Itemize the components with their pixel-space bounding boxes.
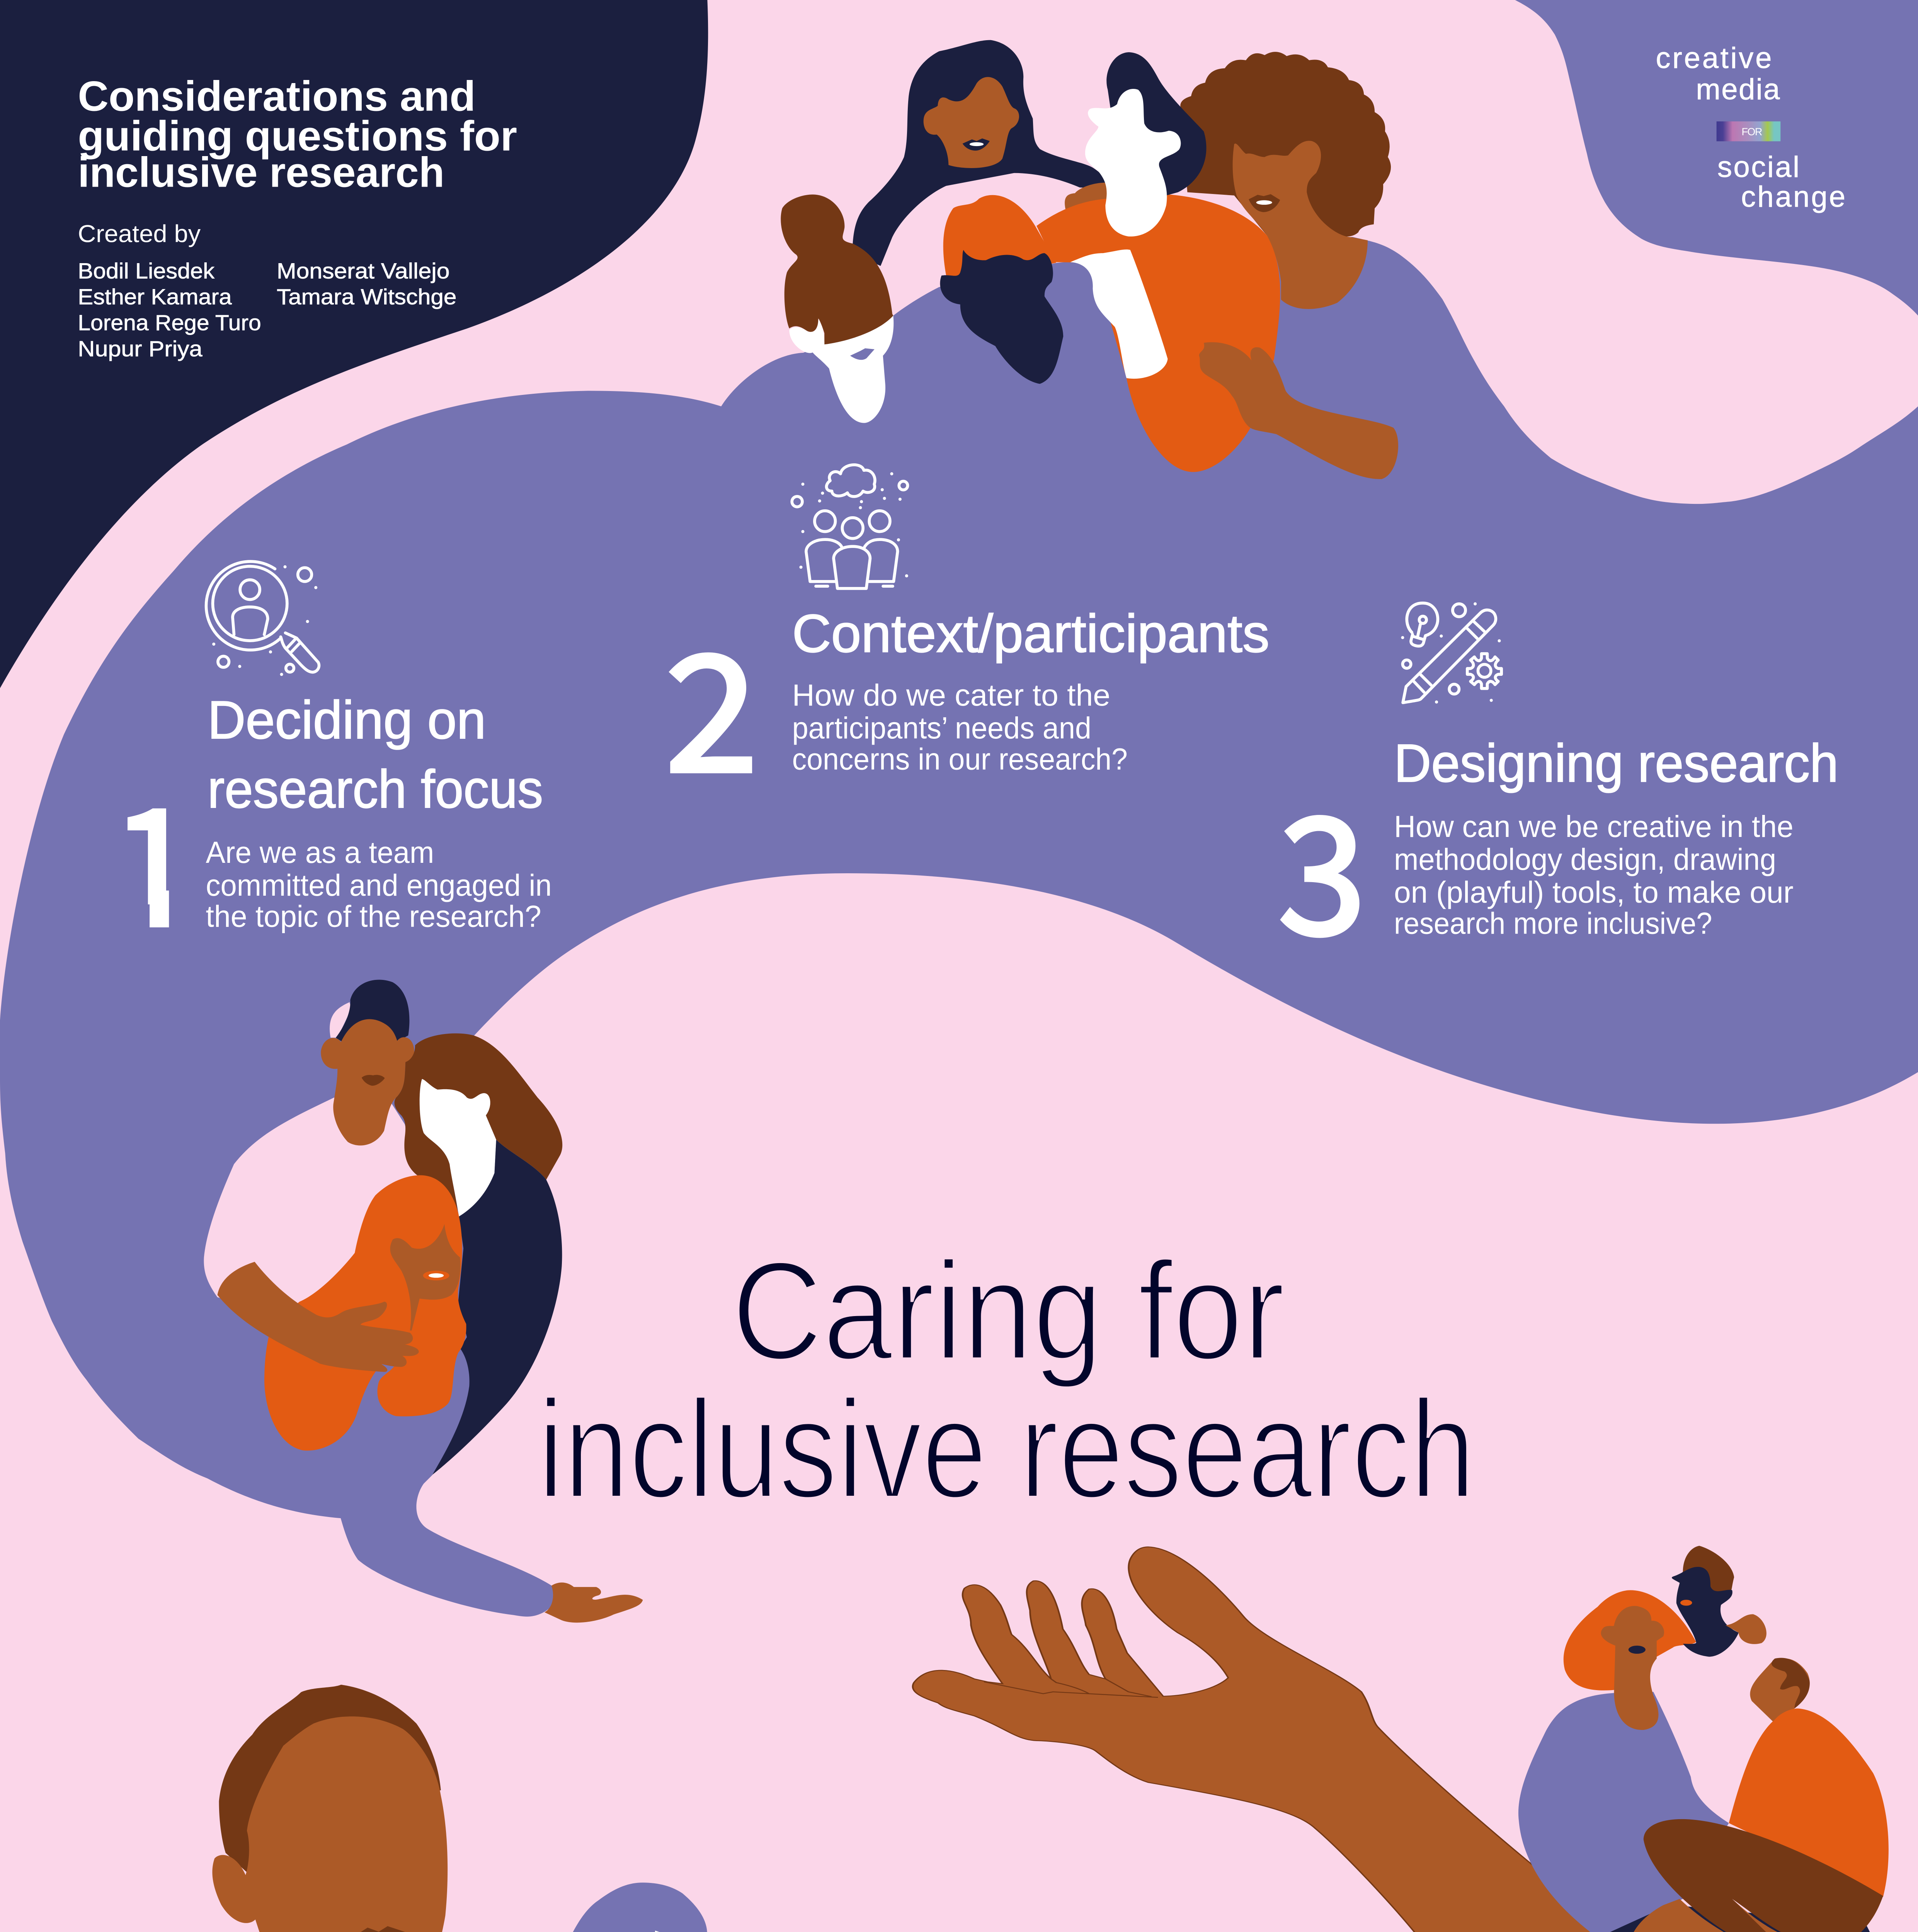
child's mouth bbox=[423, 1270, 449, 1281]
orange body bbox=[1036, 194, 1280, 472]
credit label: Created by bbox=[78, 221, 201, 248]
heading: considerations bbox=[78, 73, 517, 196]
heading block: considerations and credits bbox=[78, 73, 517, 361]
body 3: research more inclusive? bbox=[1394, 906, 1712, 940]
body 3 bbox=[1394, 810, 1794, 940]
number 3: 3 bbox=[1278, 747, 1366, 980]
author names: Bodil Liesdek bbox=[78, 259, 215, 283]
number 1 bbox=[128, 808, 169, 927]
orange body bbox=[1729, 1709, 1889, 1897]
heading: considerations: Considerations and bbox=[78, 73, 476, 120]
man's face bbox=[321, 1019, 414, 1146]
body 2: How do we cater to the bbox=[792, 678, 1110, 712]
white face with neck bbox=[1085, 89, 1181, 236]
main title: Caring for bbox=[732, 1232, 1285, 1390]
heading: considerations: guiding questions for bbox=[78, 112, 517, 160]
lips bbox=[1680, 1600, 1692, 1606]
number 2: 2 bbox=[665, 585, 758, 818]
face and neck bbox=[1601, 1606, 1664, 1730]
body 1 bbox=[206, 835, 552, 934]
author names: Lorena Rege Turo bbox=[78, 311, 261, 335]
icon: pencil, bulb and gear bbox=[1401, 602, 1501, 704]
illustration: seated people at bottom-right bbox=[1518, 1546, 1889, 1932]
body 3: How can we be creative in the bbox=[1394, 810, 1794, 844]
navy curly head bbox=[940, 250, 1063, 384]
icon: people with thought cloud bbox=[792, 465, 908, 588]
navy hair bbox=[1106, 52, 1206, 196]
icon: magnifier with person bbox=[206, 561, 319, 676]
face with dark hair bbox=[924, 77, 1019, 168]
logo: creative media for social change: FOR bbox=[1742, 126, 1762, 138]
body 1: Are we as a team bbox=[206, 835, 434, 869]
man's lips bbox=[362, 1075, 385, 1086]
dark leg bbox=[1644, 1819, 1883, 1932]
bun hair bbox=[781, 194, 893, 344]
background shape: navy wave bottom-right with notch bbox=[536, 1904, 1918, 1932]
author names bbox=[78, 259, 456, 361]
heading 1 bbox=[208, 690, 543, 819]
logo: creative media for social change: media bbox=[1696, 73, 1780, 106]
third person head bbox=[1750, 1658, 1810, 1721]
woman's white face bbox=[420, 1079, 496, 1216]
section 3: designing research bbox=[1278, 733, 1838, 980]
body 1: the topic of the research? bbox=[206, 900, 541, 934]
section 1: deciding on research focus bbox=[111, 690, 552, 971]
main title: inclusive research bbox=[538, 1371, 1475, 1527]
heading 1: research focus bbox=[208, 759, 543, 819]
woman's brown hair bbox=[395, 1033, 562, 1215]
inner leg bbox=[1732, 1899, 1801, 1932]
hand behind bbox=[1065, 183, 1113, 210]
number 1: 1 bbox=[111, 738, 197, 971]
lips bbox=[850, 348, 875, 360]
top head hair bbox=[1680, 1546, 1734, 1592]
man's face and neck bbox=[212, 1716, 448, 1932]
heading 3: Designing research bbox=[1394, 733, 1838, 793]
man's arm and hand bbox=[218, 1262, 419, 1372]
purple body bbox=[1518, 1692, 1729, 1932]
heading 2: Context/participants bbox=[792, 604, 1270, 663]
body 2: concerns in our research? bbox=[792, 742, 1128, 776]
orange sleeve bbox=[943, 195, 1056, 279]
body 1: committed and engaged in bbox=[206, 868, 552, 902]
lower brown leg bbox=[1630, 1899, 1752, 1932]
child's orange hair bbox=[264, 1175, 466, 1451]
author names: Esther Kamara bbox=[78, 285, 232, 309]
long navy hair bbox=[853, 40, 1106, 266]
heading: considerations: inclusive research bbox=[78, 149, 444, 196]
logo: creative media for social change: social bbox=[1717, 151, 1799, 184]
author names: Tamara Witschge bbox=[277, 285, 456, 309]
ear or hand bbox=[1726, 1614, 1767, 1644]
illustration: group of people at top bbox=[781, 40, 1398, 479]
man's hair bbox=[219, 1685, 441, 1875]
main title bbox=[538, 1232, 1475, 1527]
afro hair bbox=[1180, 52, 1391, 236]
background shape: bottom-left purple with man's shoulder and woman's hair bbox=[0, 1883, 865, 1932]
lower arm and hand bbox=[1199, 342, 1398, 479]
white arm bbox=[1070, 250, 1168, 379]
body 3: methodology design, drawing bbox=[1394, 842, 1776, 876]
man's navy hair bbox=[336, 980, 409, 1042]
body 2 bbox=[792, 678, 1128, 776]
illustration: embracing family on the left bbox=[204, 980, 643, 1622]
logo: creative media for social change bbox=[1656, 42, 1845, 213]
pink shirt bbox=[204, 1098, 420, 1320]
section 2: context and participants bbox=[665, 585, 1270, 818]
navy shirt bbox=[432, 1140, 562, 1475]
logo: creative media for social change: change bbox=[1741, 180, 1845, 213]
logo: creative media for social change: creative bbox=[1656, 42, 1772, 75]
lips bbox=[1629, 1646, 1646, 1654]
woman's white face and neck bbox=[589, 1930, 702, 1932]
child's face bbox=[390, 1224, 460, 1330]
white face with bun bbox=[789, 316, 893, 423]
illustration: large man and woman at bottom-left bbox=[212, 1685, 702, 1932]
lips bbox=[963, 138, 990, 151]
body 3: on (playful) tools, to make our bbox=[1394, 875, 1794, 909]
author names: Nupur Priya bbox=[78, 337, 203, 361]
background shape: top-right purple blob bbox=[1515, 0, 1918, 316]
background shape: top-left navy blob bbox=[0, 0, 708, 688]
lips bbox=[1249, 194, 1280, 212]
orange hair bbox=[1564, 1590, 1696, 1690]
navy face bbox=[1672, 1567, 1739, 1657]
body 2: participants’ needs and bbox=[792, 711, 1091, 745]
face and chest with afro bbox=[1233, 141, 1368, 309]
hand at end of purple arm bbox=[545, 1582, 643, 1622]
background shape: main purple wave bbox=[0, 237, 1918, 1617]
heading 1: Deciding on bbox=[208, 690, 486, 750]
illustration: large open hand and arm bbox=[913, 1547, 1598, 1932]
author names: Monserat Vallejo bbox=[277, 259, 450, 283]
man's lips bbox=[345, 1926, 413, 1932]
